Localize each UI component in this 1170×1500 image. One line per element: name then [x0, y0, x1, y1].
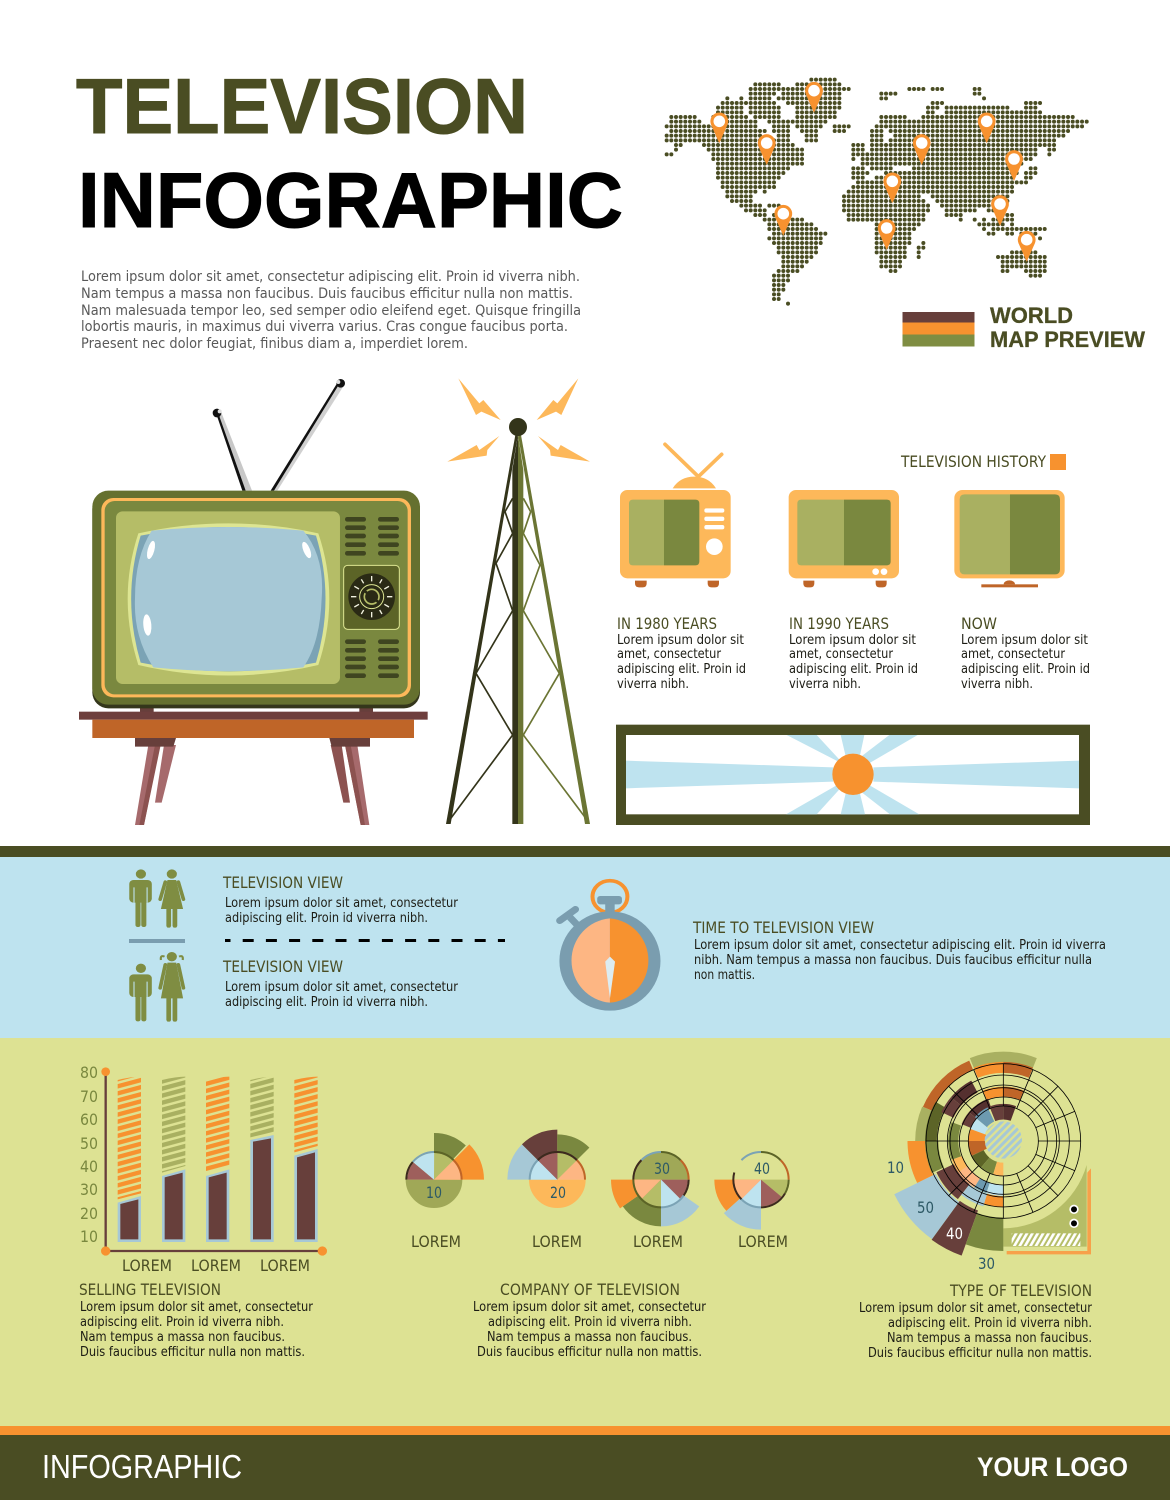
tv body [92, 491, 420, 708]
text: television view 1 [222, 873, 459, 926]
pie name labels [411, 1232, 788, 1251]
text: company of television: adipiscing elit. Proin id viverra nibh. [488, 1315, 692, 1330]
text: time to television view: nibh. Nam tempus a massa non faucibus. Duis faucibus efficitur nulla [694, 953, 1092, 968]
y axis labels: 10 [80, 1227, 98, 1246]
text: type of television: adipiscing elit. Proin id viverra nibh. [888, 1316, 1092, 1331]
radial value labels: 10 [887, 1158, 904, 1177]
y axis labels: 60 [80, 1110, 98, 1129]
retro television on table [79, 379, 428, 825]
text: television view 2 [222, 957, 459, 1010]
bars and axes [101, 1067, 327, 1256]
x axis labels [122, 1256, 310, 1275]
history column 1990 [789, 614, 918, 692]
footer [0, 1426, 1170, 1500]
pie value labels: 10 [426, 1183, 442, 1202]
pie name labels: LOREM [411, 1232, 461, 1251]
pie chart 20 [518, 1141, 596, 1219]
pie name labels: LOREM [633, 1232, 683, 1251]
intro text block: Nam malesuada tempor leo, sed semper odio eleifend eget. Quisque fringilla [81, 303, 581, 319]
text: time to television view: TIME TO TELEVISION VIEW [692, 918, 874, 937]
world map [667, 80, 1089, 304]
text: type of television: Nam tempus a massa non faucibus. [887, 1331, 1092, 1346]
icon: 1990 tv [789, 490, 899, 587]
history column 1990: IN 1990 YEARS [789, 614, 889, 633]
title: TELEVISION [76, 62, 528, 150]
text: type of television: Duis faucibus efficitur nulla non mattis. [868, 1346, 1092, 1361]
antennas [213, 379, 345, 491]
top divider band [0, 846, 1170, 857]
text: type of television: Lorem ipsum dolor sit amet, consectetur [859, 1301, 1093, 1316]
tv dial [344, 565, 399, 629]
panel: viewing time band [0, 857, 1170, 1038]
pie name labels: LOREM [532, 1232, 582, 1251]
pie value labels [426, 1159, 770, 1202]
map legend label: WORLD [990, 303, 1073, 328]
signal bolts [447, 378, 590, 462]
intro text block: lobortis mauris, in maximus dui viverra varius. Cras congue faucibus porta. [81, 319, 568, 335]
tv screen [128, 523, 329, 675]
divider bar [129, 939, 185, 943]
history icons [620, 444, 1065, 587]
text: selling television: Nam tempus a massa non faucibus. [80, 1330, 285, 1345]
radial value labels [887, 1158, 995, 1273]
radial value labels: 40 [946, 1224, 963, 1243]
text: selling television [79, 1280, 314, 1360]
history column 1980: IN 1980 YEARS [617, 614, 717, 633]
map legend flag [902, 312, 974, 346]
radial value labels: 30 [978, 1254, 995, 1273]
pie chart 30 [622, 1141, 700, 1219]
y axis labels: 80 [80, 1063, 98, 1082]
footer title: INFOGRAPHIC [42, 1448, 242, 1485]
history column 1980: amet, consectetur [617, 647, 722, 662]
broadcast tower [446, 378, 590, 824]
history column 1980: adipiscing elit. Proin id [617, 662, 746, 677]
radial chart: type of television [866, 1004, 1141, 1278]
icon: modern tv [954, 490, 1065, 587]
history column now: viverra nibh. [961, 677, 1033, 692]
text: time to television view: non mattis. [694, 968, 755, 983]
table [79, 707, 428, 825]
text: type of television [859, 1281, 1093, 1361]
history column 1990: adipiscing elit. Proin id [789, 662, 918, 677]
title: INFOGRAPHIC [78, 156, 623, 244]
history column 1990: Lorem ipsum dolor sit [789, 633, 916, 648]
text: type of television: TYPE OF TELEVISION [949, 1281, 1092, 1300]
history column 1980: viverra nibh. [617, 677, 689, 692]
text: selling television: adipiscing elit. Proin id viverra nibh. [80, 1315, 284, 1330]
intro text block [81, 269, 581, 352]
text: television view 2: adipiscing elit. Proin id viverra nibh. [225, 995, 428, 1010]
text: company of television [473, 1280, 707, 1360]
history column 1980 [617, 614, 746, 692]
television history label: TELEVISION HISTORY [900, 452, 1046, 471]
sunburst frame [616, 725, 1090, 825]
x axis labels: LOREM [260, 1256, 310, 1275]
outer segments [866, 1004, 1141, 1278]
pie value labels: 40 [754, 1159, 770, 1178]
icon: stopwatch [559, 881, 660, 1011]
text: television view 2: TELEVISION VIEW [222, 957, 343, 976]
middle segments [913, 1051, 1094, 1231]
x axis labels: LOREM [122, 1256, 172, 1275]
y axis labels [80, 1063, 98, 1246]
x axis labels: LOREM [191, 1256, 241, 1275]
radial value labels: 50 [917, 1198, 934, 1217]
hatched centre disc [985, 1121, 1022, 1159]
text: time to television view: Lorem ipsum dolor sit amet, consectetur adipiscing elit. Proin id viverra [694, 938, 1106, 953]
text: television view 1: TELEVISION VIEW [222, 873, 343, 892]
text: company of television: Lorem ipsum dolor sit amet, consectetur [473, 1300, 707, 1315]
pie value labels: 30 [654, 1159, 670, 1178]
intro text block: Praesent nec dolor feugiat, finibus diam a, imperdiet lorem. [81, 336, 468, 352]
history column now: NOW [961, 614, 997, 633]
text: television view 1: Lorem ipsum dolor sit amet, consectetur [225, 896, 459, 911]
history column now: adipiscing elit. Proin id [961, 662, 1090, 677]
text: television view 2: Lorem ipsum dolor sit amet, consectetur [225, 980, 459, 995]
text: television view 1: adipiscing elit. Proin id viverra nibh. [225, 911, 428, 926]
history column now [961, 614, 1090, 692]
history column 1990: amet, consectetur [789, 647, 894, 662]
intro text block: Lorem ipsum dolor sit amet, consectetur adipiscing elit. Proin id viverra nibh. [81, 269, 580, 285]
history column 1990: viverra nibh. [789, 677, 861, 692]
text: company of television: Nam tempus a massa non faucibus. [487, 1330, 692, 1345]
icon: child viewers [129, 952, 183, 1022]
history column now: Lorem ipsum dolor sit [961, 633, 1088, 648]
text: time to television view [692, 918, 1106, 983]
dotted continents [667, 80, 1089, 304]
pie value labels: 20 [550, 1183, 566, 1202]
tower structure [446, 418, 590, 824]
pie chart 40 [722, 1141, 800, 1219]
text: company of television: Duis faucibus efficitur nulla non mattis. [477, 1345, 702, 1360]
bar chart: selling television [80, 1063, 327, 1275]
y axis labels: 40 [80, 1157, 98, 1176]
footer logo: YOUR LOGO [977, 1452, 1128, 1482]
pie name labels: LOREM [738, 1232, 788, 1251]
text: selling television: SELLING TELEVISION [79, 1280, 221, 1299]
icon: 1980 tv [620, 444, 731, 587]
panel: statistics band [0, 1004, 1170, 1426]
corner panel [1003, 1165, 1091, 1254]
title [76, 62, 623, 244]
pie chart 10 [395, 1141, 473, 1219]
text: selling television: Lorem ipsum dolor sit amet, consectetur [80, 1300, 314, 1315]
history column 1980: Lorem ipsum dolor sit [617, 633, 744, 648]
icon: adult viewers [129, 869, 183, 928]
black grid rings [926, 1064, 1081, 1218]
map legend label: MAP PREVIEW [990, 327, 1145, 352]
y axis labels: 50 [80, 1134, 98, 1153]
inner segments [962, 1100, 1045, 1182]
map pins [710, 82, 1036, 262]
y axis labels: 70 [80, 1087, 98, 1106]
y axis labels: 30 [80, 1180, 98, 1199]
text: selling television: Duis faucibus efficitur nulla non mattis. [80, 1345, 305, 1360]
map legend label [990, 303, 1145, 352]
history column now: amet, consectetur [961, 647, 1066, 662]
tv vents [345, 517, 399, 678]
intro text block: Nam tempus a massa non faucibus. Duis faucibus efficitur nulla non mattis. [81, 286, 573, 302]
text: company of television: COMPANY OF TELEVISION [500, 1280, 680, 1299]
y axis labels: 20 [80, 1204, 98, 1223]
